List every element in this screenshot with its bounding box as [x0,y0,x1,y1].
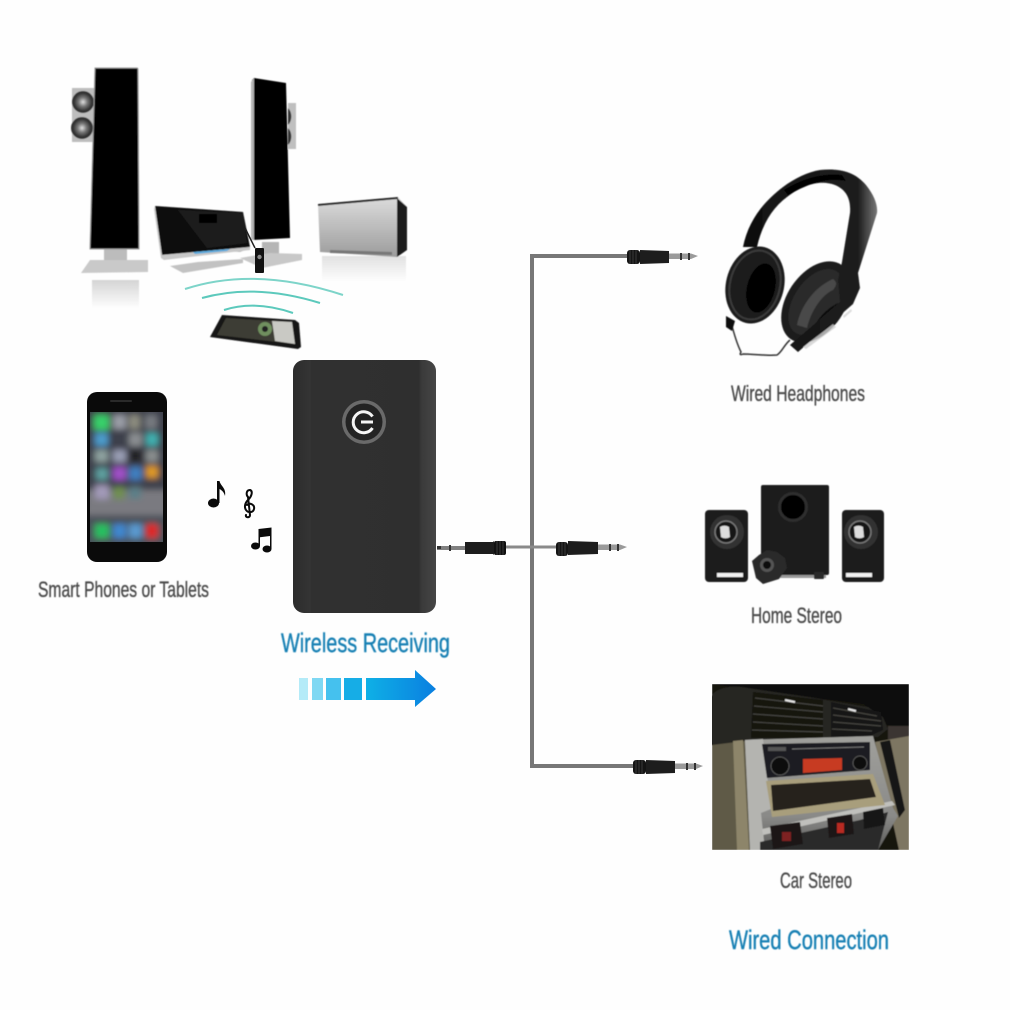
cable: branch wiring [505,256,633,766]
icon: left tower speaker [72,68,148,308]
icon: treble clef [245,490,254,517]
icon: eighth music note [208,481,225,508]
dashboard air vents [700,687,888,748]
left ear cup [717,240,793,330]
image: car dashboard stereo [700,684,909,850]
upper dark interior [716,684,908,725]
icon: mini hi-fi unit [154,206,250,273]
icon: wired headphones [717,170,877,356]
subwoofer [761,485,829,579]
label: wireless receiving: Wireless Receiving [281,628,450,658]
icon: bluetooth transmitter receiver device [293,360,436,613]
icon: smartphone [85,392,168,562]
right ear cup [767,248,865,356]
icon: home stereo speakers [705,485,884,584]
headphone cable [731,322,790,355]
label: car stereo: Car Stereo [780,868,852,893]
arrow: wireless signal direction [299,670,436,707]
icon: right tower speaker [240,78,302,268]
icon: device output jack [437,541,506,555]
icon: bluetooth adapter on stand [245,228,264,273]
storage pocket [766,774,885,817]
beige trim [712,741,750,850]
volume puck [752,550,787,584]
right satellite speaker [842,510,884,582]
icon: jack plug top [627,250,698,264]
silver centre frame [745,736,898,850]
icon: jack plug middle [556,541,627,556]
icon: jack plug bottom [633,760,703,774]
icon: silver subwoofer box [318,197,407,282]
phone home screen icons [90,412,163,542]
left satellite speaker [705,510,748,582]
label: wired headphones: Wired Headphones [731,381,865,406]
panel: wireless hi-fi system [72,68,407,349]
icon: phone lying flat [210,315,301,349]
label: home stereo: Home Stereo [751,603,842,628]
car radio [762,742,870,778]
label: smart phones or tablets: Smart Phones or Tablets [38,577,209,602]
icon: beamed music notes [251,528,272,552]
icon: wireless signal arcs [185,279,343,313]
power button [342,400,386,444]
hazard and control buttons [770,808,885,849]
headband and slider arm [743,170,877,352]
label: wired connection: Wired Connection [729,925,889,955]
